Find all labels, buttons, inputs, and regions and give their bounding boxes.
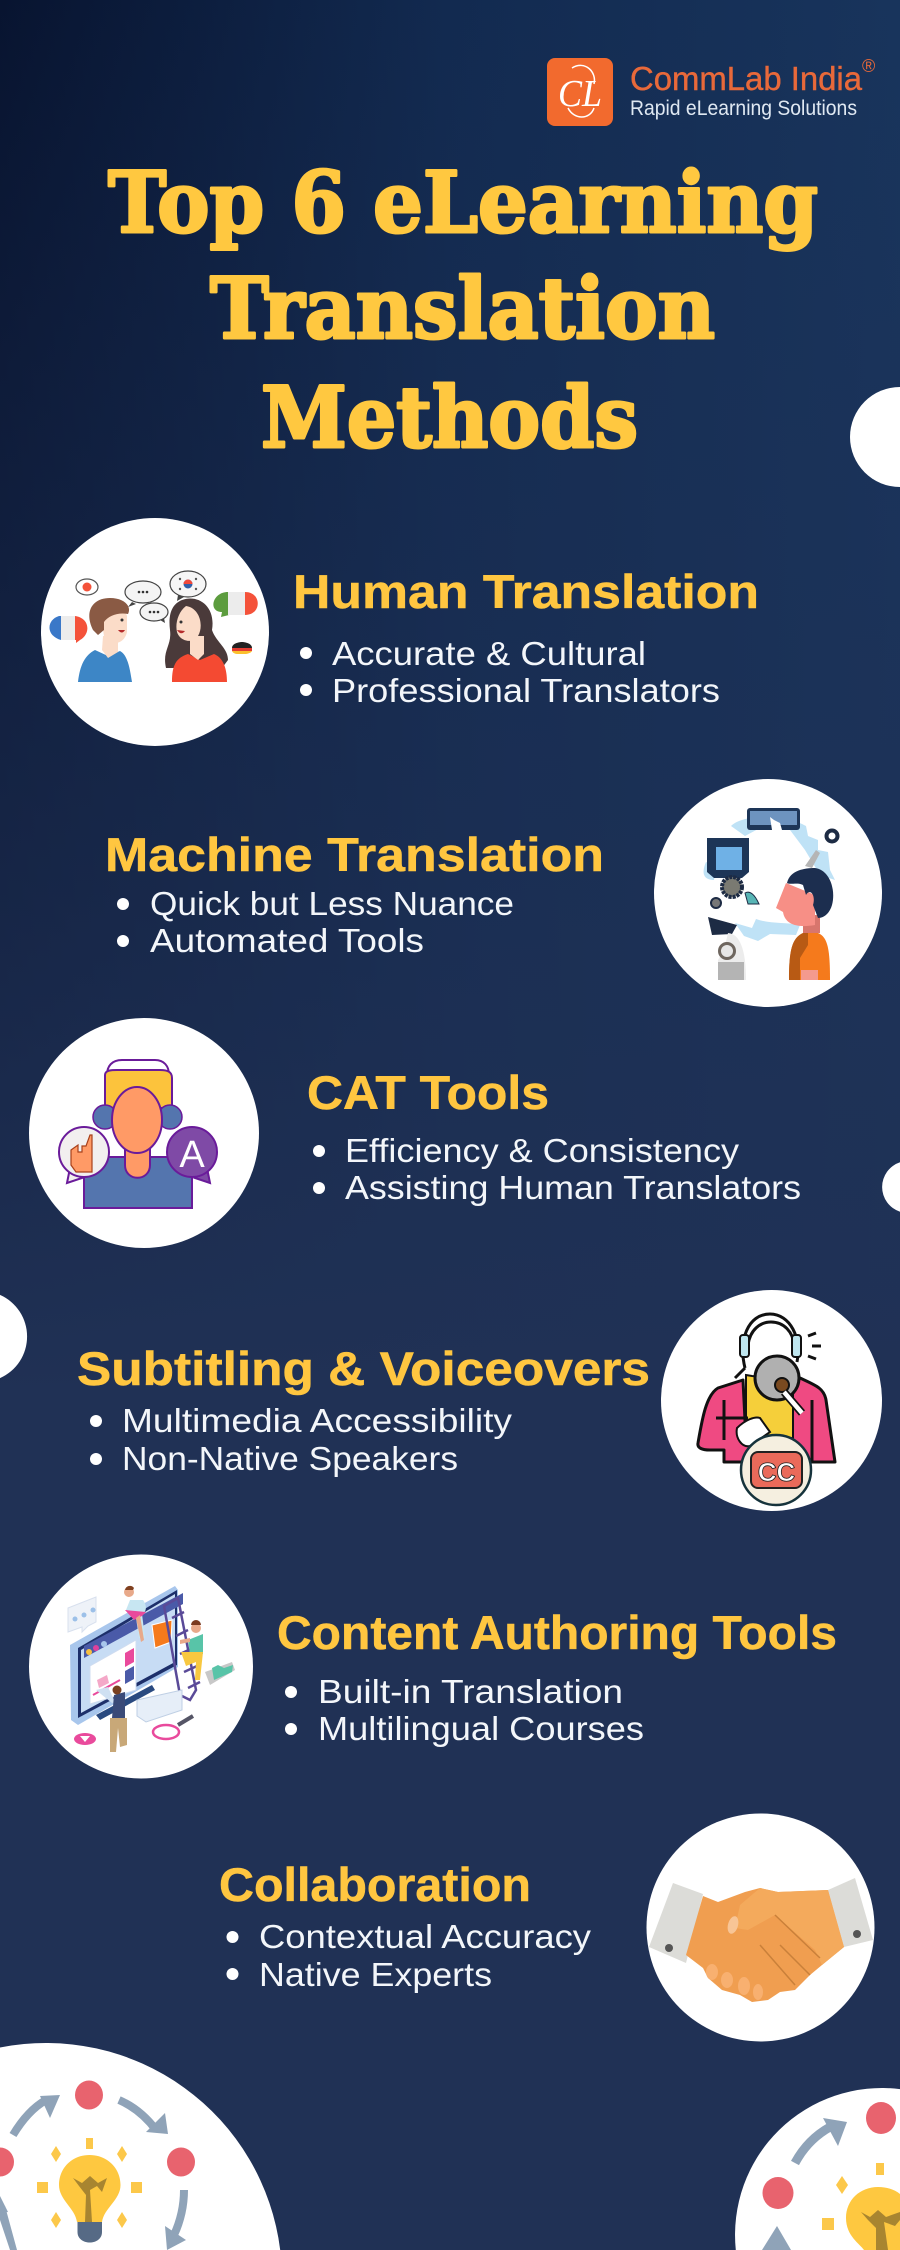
heading: Subtitling & Voiceovers xyxy=(77,1342,650,1395)
icon: bottom right light bulb cycle xyxy=(735,2088,900,2250)
icon: voiceover artist with CC badge xyxy=(661,1290,882,1511)
bullet list xyxy=(300,635,720,709)
logo: CommLab India xyxy=(547,56,875,126)
logo: CommLab India: CL xyxy=(558,73,602,115)
logo: CommLab India: ® xyxy=(862,56,875,76)
panel: Subtitling & Voiceovers xyxy=(77,1290,882,1511)
title xyxy=(108,153,818,467)
bullet list: Efficiency & Consistency xyxy=(345,1132,740,1169)
heading: Collaboration xyxy=(219,1858,531,1911)
icon: bottom left light bulb cycle xyxy=(0,2043,280,2250)
logo: CommLab India: CommLab India xyxy=(630,60,863,97)
icon: voiceover artist with CC badge: CC xyxy=(758,1457,795,1487)
bullet list xyxy=(226,1918,592,1993)
panel: CAT Tools xyxy=(29,1018,801,1248)
title: Top 6 eLearning xyxy=(108,153,818,252)
panel: Machine Translation xyxy=(105,779,882,1007)
heading: Machine Translation xyxy=(105,828,604,881)
bullet list xyxy=(313,1132,801,1206)
bullet list: Non-Native Speakers xyxy=(122,1440,458,1477)
icon: handshake xyxy=(646,1814,874,2042)
bullet list: Contextual Accuracy xyxy=(259,1918,592,1955)
panel: Collaboration xyxy=(219,1814,874,2042)
bullet list: Automated Tools xyxy=(150,922,424,959)
bullet list: Assisting Human Translators xyxy=(345,1169,801,1206)
bullet list: Multimedia Accessibility xyxy=(122,1402,513,1439)
heading: CAT Tools xyxy=(307,1066,549,1119)
heading: Human Translation xyxy=(293,565,759,618)
bullet list xyxy=(90,1402,513,1477)
panel: Content Authoring Tools xyxy=(29,1554,837,1778)
bullet list: Native Experts xyxy=(259,1956,492,1993)
icon: two people conversing with flag bubbles xyxy=(41,518,269,746)
icon: translator with headset and speech bubbles xyxy=(29,1018,259,1248)
bullet list xyxy=(117,885,514,959)
icon: people building an authoring screen xyxy=(29,1554,253,1778)
bullet list: Built-in Translation xyxy=(318,1673,623,1710)
bullet list: Professional Translators xyxy=(332,672,720,709)
logo: CommLab India: Rapid eLearning Solutions xyxy=(630,97,857,120)
title: Methods xyxy=(261,368,638,467)
decorative circle: top right xyxy=(850,387,900,487)
icon: translator with headset and speech bubbles: A xyxy=(179,1134,205,1176)
heading: Content Authoring Tools xyxy=(277,1606,837,1659)
decorative circle: middle right xyxy=(882,1162,900,1212)
decorative circle: middle left xyxy=(0,1295,27,1378)
bullet list: Accurate & Cultural xyxy=(332,635,646,672)
bullet list: Multilingual Courses xyxy=(318,1710,644,1747)
panel: Human Translation xyxy=(41,518,759,746)
bullet list xyxy=(285,1673,644,1747)
icon: person with machine parts xyxy=(654,779,882,1007)
title: Translation xyxy=(210,259,715,358)
bullet list: Quick but Less Nuance xyxy=(150,885,514,922)
